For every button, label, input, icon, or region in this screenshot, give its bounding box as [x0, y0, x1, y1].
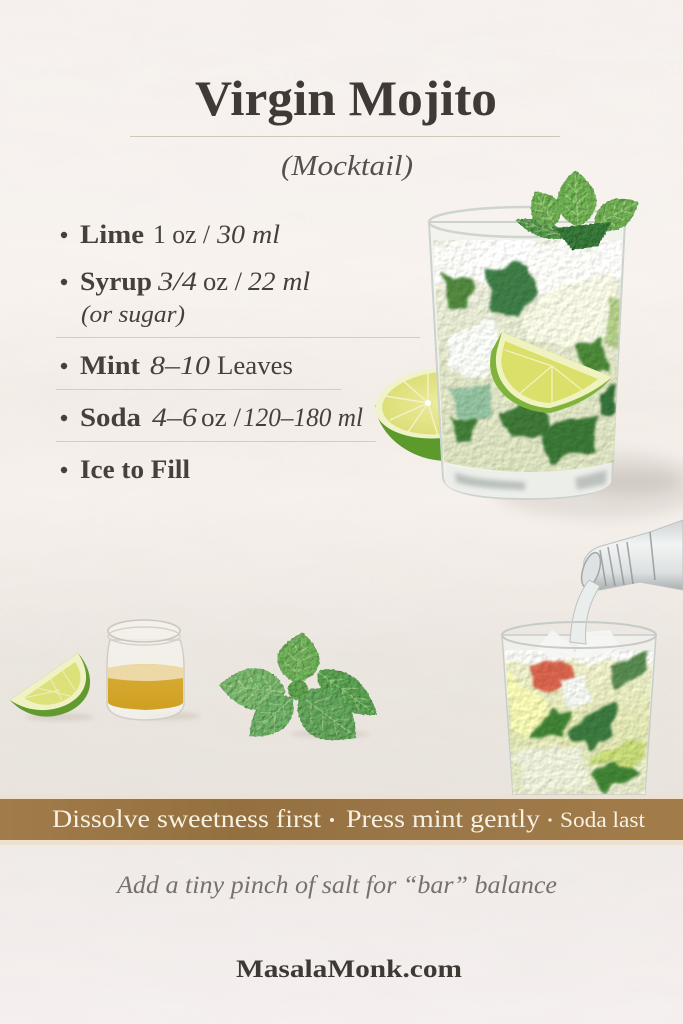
ingredient: soda: [61, 403, 363, 432]
tips band: [0, 795, 683, 845]
ingredient: soda: oz /: [201, 403, 242, 432]
tip two: Press mint gently: [346, 806, 541, 833]
illustration: halved lime: [375, 368, 443, 461]
ingredient list: [56, 220, 420, 484]
ingredient: mint: [61, 351, 293, 380]
ingredient: mint: Mint: [80, 351, 140, 380]
tip separator: [548, 818, 552, 822]
rim: [502, 622, 656, 648]
muddled mint: [442, 272, 472, 312]
illustration: mojito glass: [420, 169, 680, 499]
ingredient: soda: 120–180 ml: [243, 403, 363, 432]
illustration: mint sprig: [217, 629, 387, 757]
website: MasalaMonk.com: [236, 956, 462, 983]
illustration: syrup jar: [107, 620, 200, 720]
ingredient: lime: 1 oz /: [153, 220, 211, 249]
illustration: bottle pouring: [578, 520, 683, 590]
glass body: [429, 222, 625, 499]
divider: [56, 441, 376, 442]
ingredient: lime: 30 ml: [216, 220, 280, 249]
ingredient: syrup: (or sugar): [81, 302, 185, 328]
mint garnish: [513, 169, 645, 250]
glass rim: [429, 207, 625, 237]
lime wedge in glass: [490, 332, 612, 413]
illustration: soda glass: [501, 580, 657, 795]
ingredient: soda: Soda: [80, 403, 141, 432]
glass base: [445, 465, 611, 498]
tip separator: [330, 818, 334, 822]
ice cubes: [461, 240, 535, 286]
divider: [56, 337, 420, 338]
salt note: Add a tiny pinch of salt for “bar” balance: [115, 872, 557, 899]
ingredient: mint: Leaves: [217, 351, 293, 380]
title: Virgin Mojito: [195, 70, 497, 126]
glass shadow: [580, 469, 680, 495]
subtitle: (Mocktail): [281, 150, 413, 182]
drink: [433, 240, 622, 472]
divider: [56, 389, 341, 390]
ingredient: ice: Ice to Fill: [80, 455, 190, 484]
illustration: lime wedge: [10, 653, 94, 721]
ingredient: lime: Lime: [80, 220, 144, 249]
ingredient: syrup: 3/4: [157, 267, 197, 296]
soda stream: [570, 580, 600, 644]
ingredient: mint: 8–10: [150, 351, 210, 380]
ingredient: syrup: [61, 267, 310, 328]
ingredient: syrup: 22 ml: [248, 267, 310, 296]
tip one: Dissolve sweetness first: [52, 806, 321, 833]
ingredient: lime: [61, 220, 280, 249]
title divider: [130, 136, 560, 137]
drink: [505, 650, 653, 794]
ice: [537, 630, 620, 658]
ingredient: syrup: oz /: [203, 267, 243, 296]
ingredient: syrup: Syrup: [80, 267, 152, 296]
ingredient: soda: 4–6: [152, 403, 197, 432]
tip three: Soda last: [560, 807, 645, 832]
